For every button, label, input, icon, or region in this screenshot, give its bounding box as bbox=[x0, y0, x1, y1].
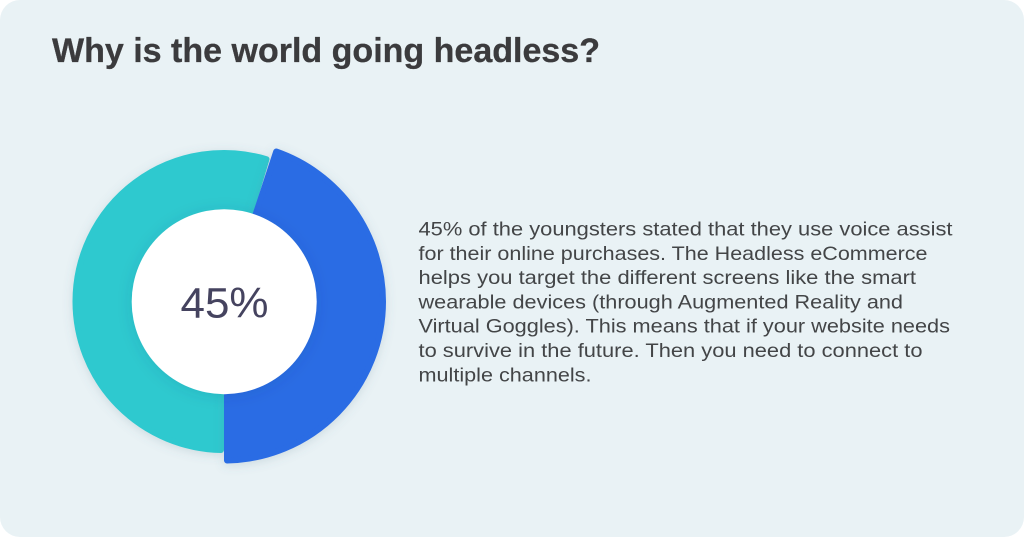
segment: teal remainder 55% bbox=[75, 153, 266, 450]
inner white circle bbox=[132, 209, 317, 394]
segment: blue 45% bbox=[227, 152, 383, 460]
text block: description: multiple channels. bbox=[418, 364, 592, 386]
text block: description bbox=[417, 218, 953, 386]
text block: description: wearable devices (through Augmented Reality and bbox=[417, 291, 903, 313]
value label: 45% bbox=[180, 280, 268, 328]
donut chart: 45% bbox=[75, 152, 383, 460]
text block: description: to survive in the future. Then you need to connect to bbox=[418, 340, 923, 362]
text block: description: 45% of the youngsters stated that they use voice assist bbox=[418, 218, 953, 240]
text block: description: for their online purchases. The Headless eCommerce bbox=[418, 243, 928, 265]
title: Why is the world going headless? bbox=[52, 32, 600, 70]
text block: description: helps you target the different screens like the smart bbox=[418, 267, 917, 289]
text block: description: Virtual Goggles). This means that if your website needs bbox=[418, 316, 950, 338]
